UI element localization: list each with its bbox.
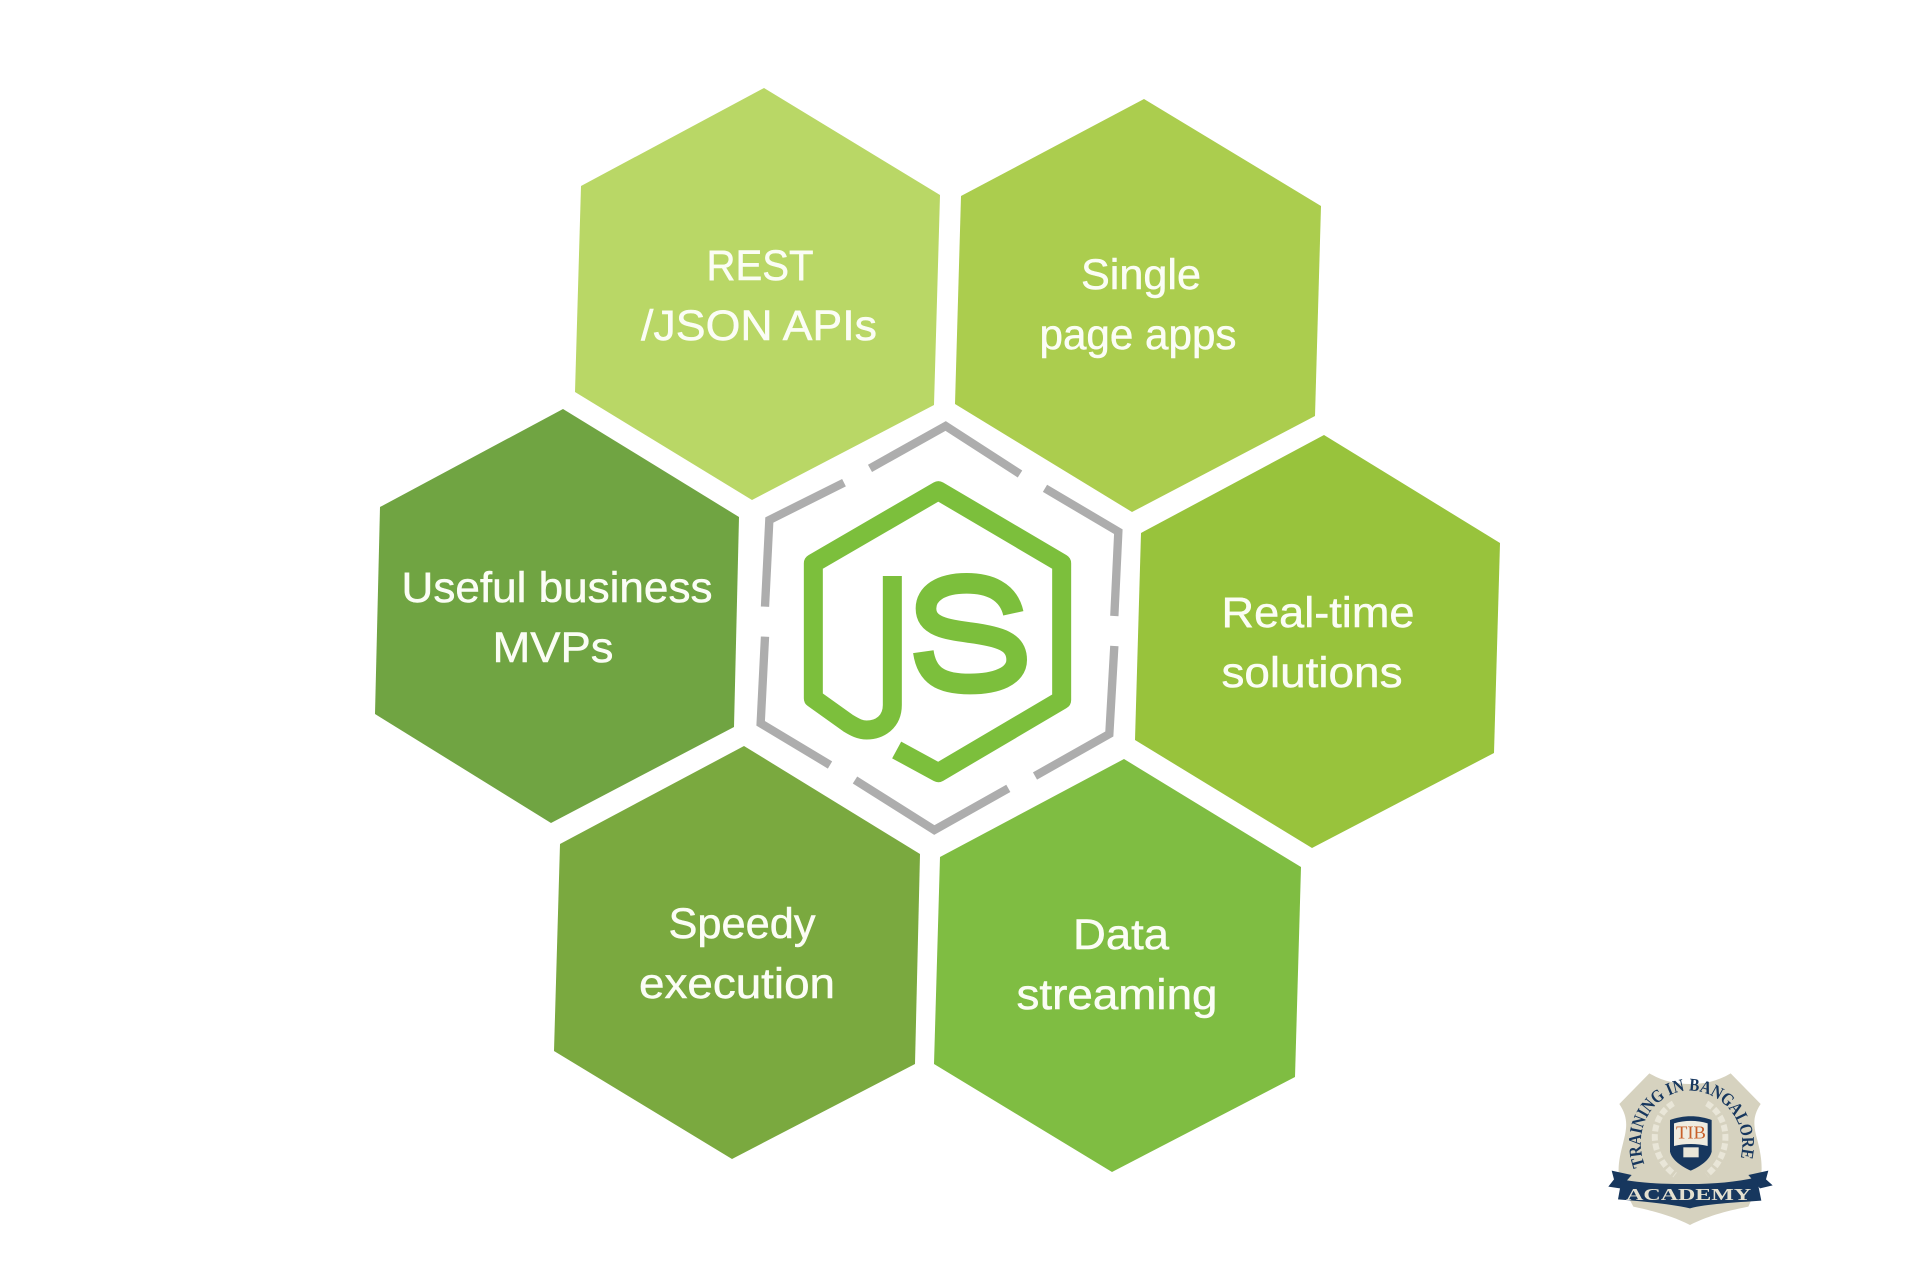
hexagon: REST / JSON APIs [575,88,940,500]
hexagon: Real-time solutions: solutions [1222,649,1402,697]
hexagon: Data streaming: Data [1073,911,1169,959]
crest panel [1674,1121,1708,1146]
arc text: TRAINING IN BANGALORE [1629,1078,1754,1169]
hexagon: Real-time solutions [1135,435,1500,848]
hexagon: Speedy execution: execution [639,960,835,1008]
hexagon: Single page apps [955,99,1321,512]
laurel wreath [1655,1103,1725,1175]
letter S [923,583,1017,684]
hexagon: Useful business MVPs: Useful business [402,564,712,612]
dashed grey hexagon frame [761,426,1118,830]
green hexagon with J [813,491,1062,773]
hexagon: Single page apps: Single [1081,251,1201,299]
hexagon: Single page apps: page apps [1040,311,1236,359]
icon: Node JS logo [761,426,1118,830]
hexagon: Data streaming [934,759,1301,1172]
badge: TIB Academy [1608,1074,1773,1225]
hexagon: REST / JSON APIs: REST [706,242,814,290]
ribbon tails [1608,1171,1773,1188]
hexagon: Useful business MVPs [375,409,739,823]
academy label: ACADEMY [1626,1185,1751,1204]
hexagon: Useful business MVPs: MVPs [492,624,614,672]
hexagon: Speedy execution [554,746,920,1159]
hexagon: Real-time solutions: Real-time [1222,589,1414,637]
ribbon [1618,1177,1761,1208]
crest letters: TIB [1676,1123,1706,1143]
hexagon: Data streaming: streaming [1016,971,1218,1019]
hexagon: REST / JSON APIs: /JSON APIs [641,302,877,350]
shield background [1619,1073,1762,1225]
book [1683,1147,1699,1157]
hexagon: Speedy execution: Speedy [668,900,816,948]
crest [1670,1116,1712,1171]
